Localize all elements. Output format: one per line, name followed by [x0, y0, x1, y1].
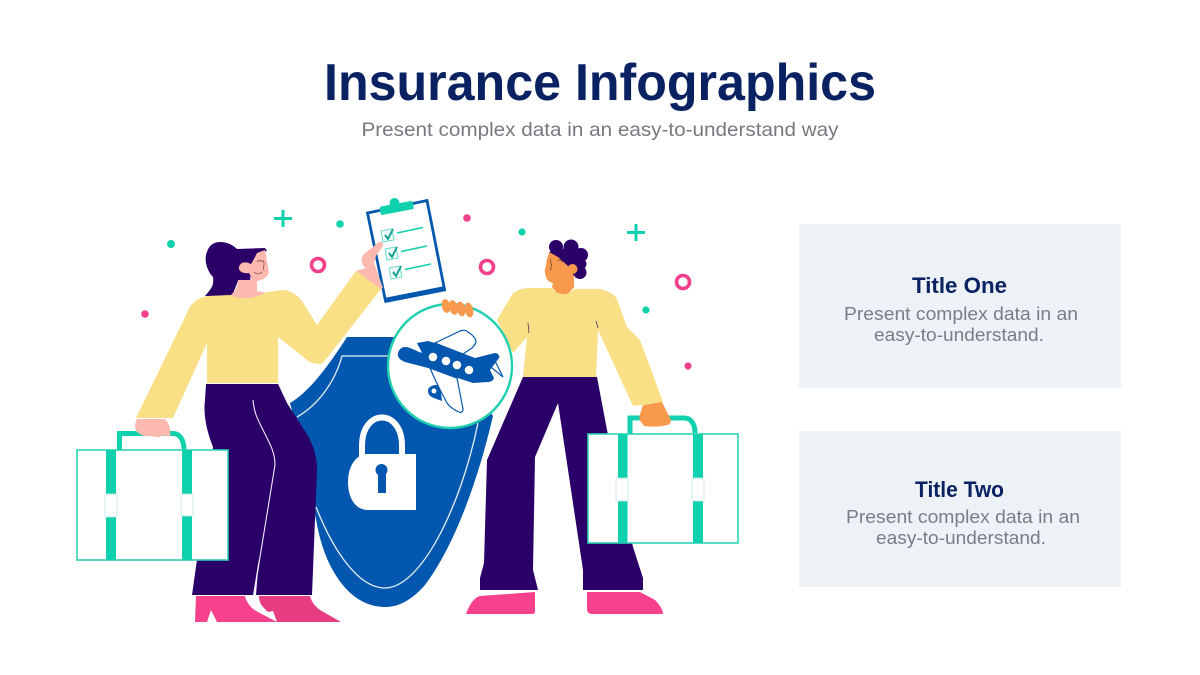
icon: padlock [348, 418, 416, 510]
woman figure [136, 242, 383, 622]
shoes [466, 592, 535, 614]
man figure [466, 240, 663, 614]
boots [195, 596, 277, 622]
sweater [136, 271, 381, 418]
panel: title one [799, 224, 1121, 388]
hand on left briefcase [135, 419, 170, 437]
briefcase right [588, 402, 738, 543]
card text: Present complex data in an [844, 303, 1078, 324]
card heading: Title Two [915, 477, 1004, 502]
sweater [497, 288, 663, 406]
card heading: Title One [912, 273, 1007, 298]
card text: easy-to-understand. [874, 324, 1044, 345]
briefcase left [77, 419, 228, 560]
curly hair [549, 240, 588, 279]
trousers [192, 384, 317, 595]
face [239, 250, 269, 281]
shield [290, 337, 493, 607]
man's fingers on badge [440, 298, 475, 318]
subtitle: Present complex data in an easy-to-understand way [362, 119, 839, 141]
neck [230, 280, 268, 299]
card text: Present complex data in an [846, 506, 1080, 527]
hair [205, 242, 267, 296]
icon: airplane [398, 330, 503, 412]
trousers [480, 377, 643, 590]
head [545, 252, 574, 296]
panel: title two [799, 431, 1121, 587]
card text [846, 506, 1080, 548]
decorative dots, rings and plus signs [141, 210, 692, 370]
title: Insurance Infographics [324, 54, 876, 112]
card text [844, 303, 1078, 345]
clipboard [368, 198, 446, 303]
raised hand [356, 242, 383, 292]
plane badge [388, 304, 512, 428]
card text: easy-to-understand. [876, 527, 1046, 548]
checklist [381, 228, 431, 279]
hand on right briefcase [639, 402, 671, 427]
